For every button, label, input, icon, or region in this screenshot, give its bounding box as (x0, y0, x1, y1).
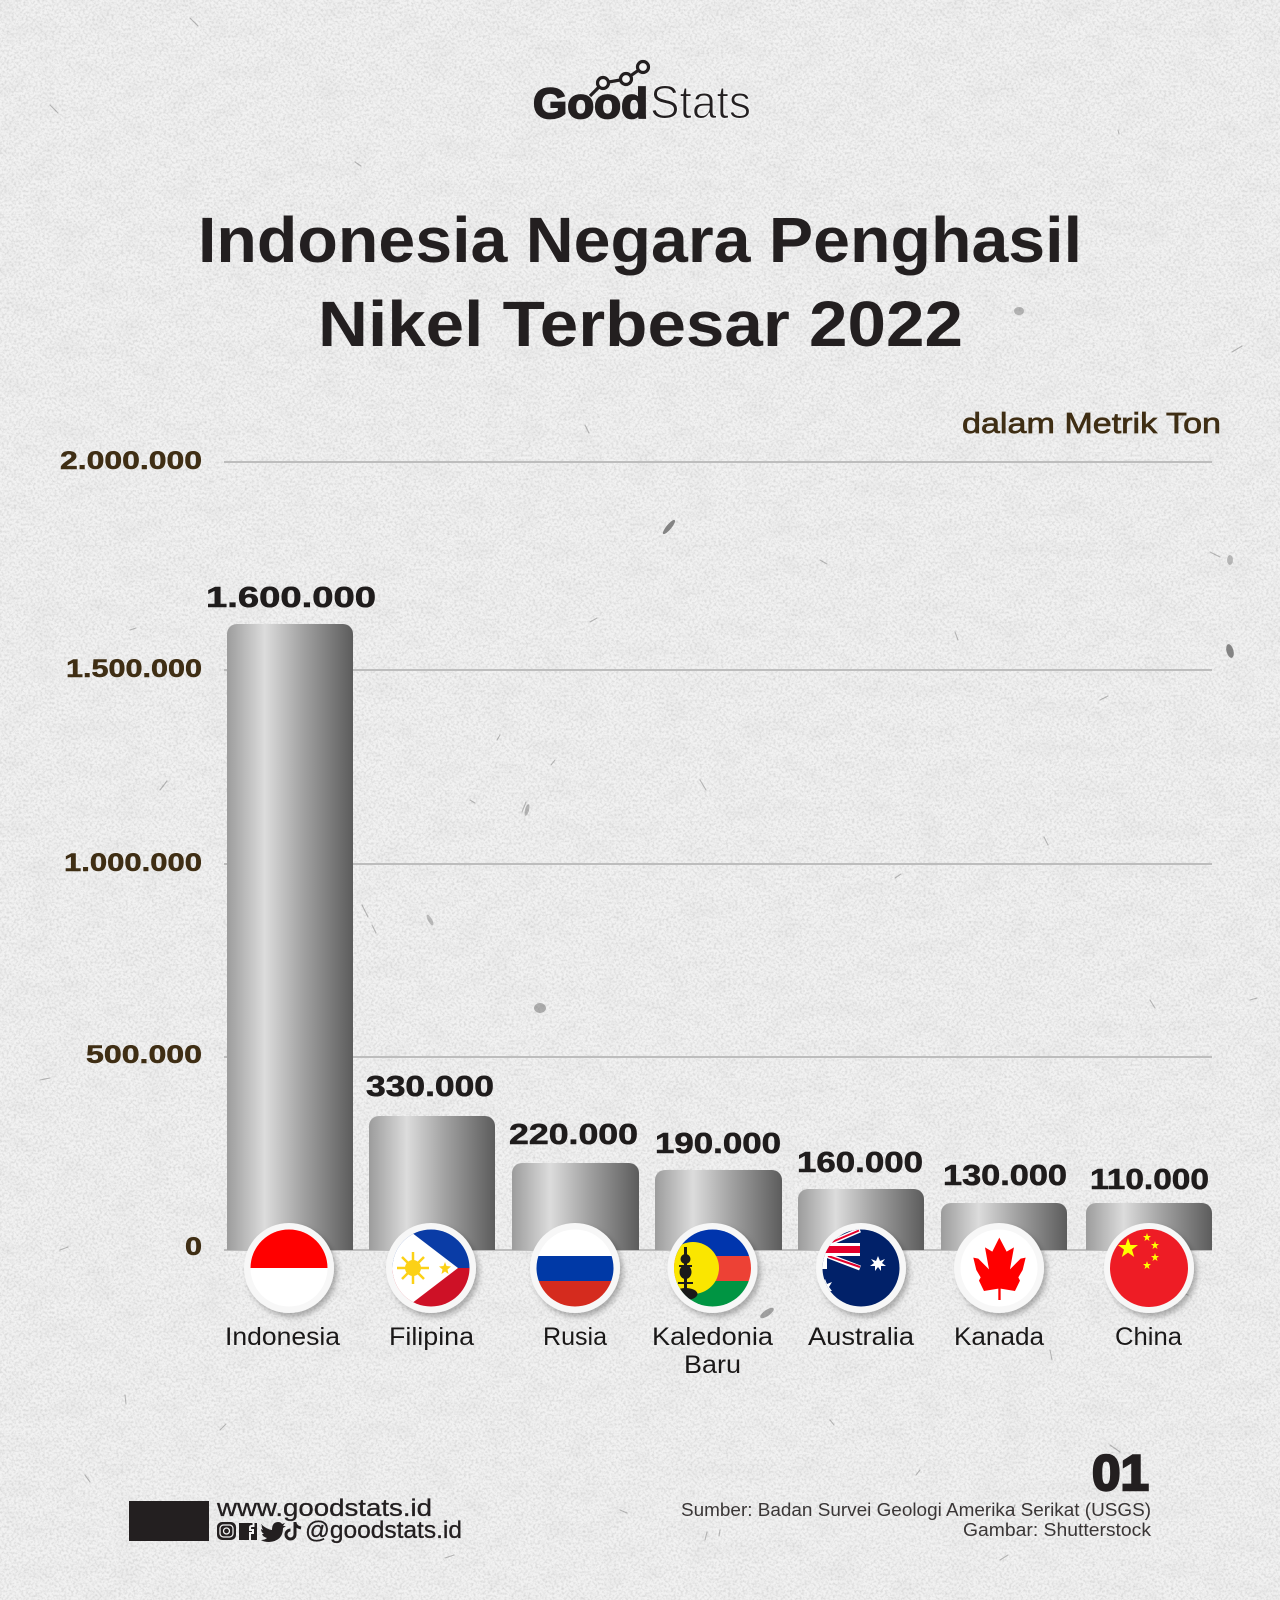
logo: GoodStats (533, 62, 751, 128)
value labels: 1.600.000 (206, 582, 376, 614)
footer black block (129, 1501, 209, 1541)
value labels: 130.000 (943, 1160, 1067, 1192)
footer: website and social (129, 1495, 462, 1544)
y axis labels: 0 (185, 1233, 202, 1261)
social handle: @goodstats.id (305, 1517, 462, 1544)
value labels: 220.000 (509, 1119, 638, 1151)
flag: China (1104, 1223, 1194, 1313)
footer: page number and source (681, 1445, 1152, 1540)
flag: Rusia (530, 1223, 620, 1313)
logo chart line (590, 62, 648, 96)
country labels: Rusia (543, 1323, 607, 1351)
country labels: Kaledonia (652, 1323, 773, 1351)
country labels (225, 1323, 1182, 1379)
y axis labels: 1.000.000 (64, 849, 202, 877)
country labels: Australia (808, 1323, 914, 1351)
y axis labels: 2.000.000 (60, 447, 202, 475)
title: Indonesia Negara Penghasil (198, 204, 1082, 276)
source (681, 1500, 1152, 1540)
source: Sumber: Badan Survei Geologi Amerika Serikat (USGS) (681, 1500, 1151, 1520)
flag: Kanada (954, 1223, 1044, 1313)
country labels: Filipina (389, 1323, 474, 1351)
value labels (206, 582, 1209, 1196)
flag: Kaledonia Baru (667, 1223, 758, 1313)
flag: Australia (816, 1223, 906, 1313)
website: www.goodstats.id (216, 1495, 432, 1522)
gridlines (224, 462, 1212, 1250)
bar chart (60, 447, 1212, 1379)
logo wordmark: Good (533, 80, 648, 128)
country labels: Indonesia (225, 1323, 340, 1351)
source: Gambar: Shutterstock (963, 1520, 1152, 1540)
y axis labels (60, 447, 202, 1261)
icon: twitter (261, 1522, 286, 1542)
logo wordmark (533, 76, 751, 128)
y axis labels: 1.500.000 (66, 655, 202, 683)
bars (227, 624, 1212, 1250)
flag: Indonesia (244, 1223, 334, 1313)
y axis labels: 500.000 (86, 1041, 202, 1069)
value labels: 190.000 (655, 1128, 781, 1160)
value labels: 110.000 (1090, 1164, 1209, 1196)
icon: instagram (217, 1522, 236, 1540)
icon: tiktok (286, 1522, 301, 1539)
title (198, 204, 1082, 360)
value labels: 160.000 (797, 1147, 923, 1179)
logo wordmark: Stats (650, 76, 751, 128)
country labels: Kanada (954, 1323, 1044, 1351)
value labels: 330.000 (366, 1071, 494, 1103)
title: Nikel Terbesar 2022 (318, 288, 963, 360)
icon: facebook (239, 1523, 257, 1540)
flag: Filipina (386, 1223, 476, 1313)
unit label: dalam Metrik Ton (962, 408, 1221, 440)
country labels: China (1115, 1323, 1182, 1351)
page number: 01 (1092, 1445, 1149, 1501)
country labels: Baru (684, 1351, 741, 1379)
